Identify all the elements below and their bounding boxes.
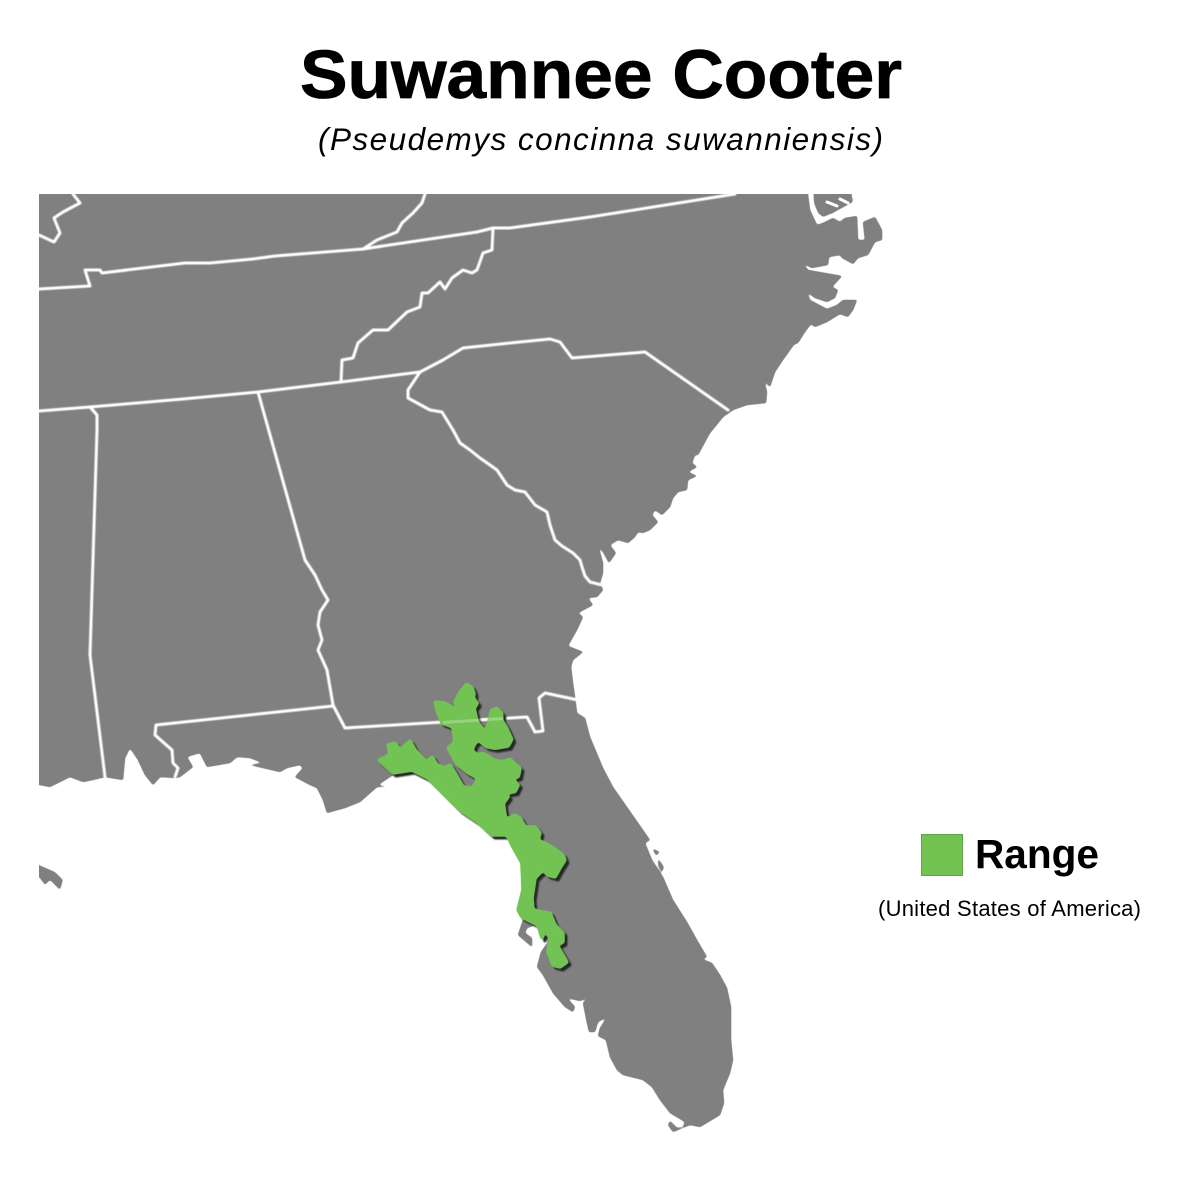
legend (878, 831, 1141, 921)
range fill (379, 684, 567, 967)
legend swatch (922, 834, 962, 876)
state borders (39, 194, 735, 777)
legend label: Range (975, 831, 1099, 877)
barrier islands on the east coast (652, 848, 664, 873)
state border seen through the range (443, 718, 503, 722)
northern neck at top right (813, 194, 853, 217)
legend note: (United States of America) (878, 896, 1141, 921)
range area: green with drop shadow (379, 684, 570, 970)
range shadow (382, 687, 570, 970)
subtitle: scientific name: (Pseudemys concinna suwanniensis) (318, 121, 883, 157)
island (39, 864, 63, 889)
map: southeastern United States (30, 185, 882, 1132)
title: Suwannee Cooter (300, 36, 902, 113)
land mass (30, 185, 882, 1132)
white inlets on the northern neck (827, 199, 848, 206)
